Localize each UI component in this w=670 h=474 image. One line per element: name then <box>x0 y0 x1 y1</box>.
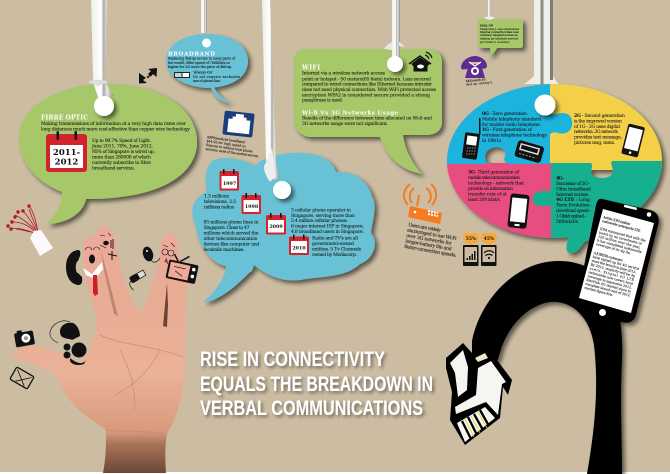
text: phone lines: millions which served the <box>204 230 259 236</box>
cable: network cable <box>472 261 622 474</box>
icon: smartphone 3G <box>507 193 530 229</box>
text: 2G: provides text message, <box>574 134 623 140</box>
text: cellular and ISP: Singapore, serving more than <box>291 213 355 219</box>
icon: calendar 2010: 2010 <box>292 246 306 252</box>
text: dial-up: ordinary telephone lines by <box>480 33 518 37</box>
heading: wifi vs 3g: Wi-fi Vs 3G Networks Usage <box>301 110 398 116</box>
text: 0G and 1G: for mobile radio telephone. <box>482 122 542 128</box>
text: broadband description: Do not require exclusive <box>193 75 240 79</box>
text: 3G: 3G- Third generation of <box>468 170 519 176</box>
text: phone lines: devices like computer and <box>204 242 260 248</box>
text: wifi encouragement: Users are widely <box>408 222 442 234</box>
finger face: talking with tie <box>83 247 103 296</box>
text: radio and TV: entities. 5 Tv Channels <box>312 246 362 252</box>
hanging ribbon: dial-up <box>484 0 495 20</box>
text: 4G: 500mbit/s <box>556 219 579 225</box>
text: phone article: nationwide coverage for LTE. <box>602 219 641 233</box>
text: 3G: least 200 kbit/s. <box>468 197 502 203</box>
text: phone article: IDM announced that with the <box>600 227 646 243</box>
icon: modem sockets <box>174 72 190 78</box>
text: phone article: complete launch end of 2012 <box>585 282 630 298</box>
text: wifi encouragement: over 3G networks for <box>406 233 453 247</box>
text: cellular and ISP <box>291 208 365 235</box>
text: wifi description: point or hotspot - 50 meters(65 feets) indoors. Less secured <box>302 76 431 82</box>
text: cellular and ISP: 4.8 broadband users in Singapore. <box>291 229 365 235</box>
text: fibre optic facts: June 2011, 70%, June 2012, <box>91 144 154 150</box>
text: phone article: A JOBSDB customers <box>592 251 623 263</box>
icon: calendar 1997: 1997 <box>223 181 236 187</box>
text: 2G <box>574 113 625 146</box>
text: phone article: Article: IDM realizes <box>602 215 631 226</box>
text: phone article: StarHub 4G started since to <box>586 278 631 294</box>
text: dial-up <box>480 24 520 44</box>
text: 3G: transfer rate of at <box>468 192 507 198</box>
icon: smartphone 2G <box>621 123 645 158</box>
text: broadband price: $39*/month for broadband <box>207 135 245 144</box>
text: phone lines <box>204 220 260 253</box>
icon: 55% cellular phone <box>463 233 479 266</box>
text: wifi encouragement: faster-connection speeds. <box>404 244 458 259</box>
text: fibre optic facts: 95% of Singapore is wired up, <box>92 149 156 155</box>
icon: 55% cellular phone: 55% <box>466 236 477 242</box>
heading: fibre optic: FIBRE OPTIC <box>41 114 88 122</box>
speech bubble: dial-up <box>478 19 523 57</box>
puzzle piece: pink 3G <box>440 163 551 245</box>
finger face: glasses <box>162 243 175 264</box>
text: phone article: coverage of its 4g lte. <box>595 242 631 255</box>
icon: fibre cable with red tips <box>6 204 53 256</box>
text: dial-up: Temporary, non-dedicated <box>480 27 519 31</box>
icon: envelope <box>10 367 34 389</box>
text: 4G: Successor of 3G - <box>556 181 590 187</box>
text: wifi encouragement: encouraged to use Wi-Fi <box>407 227 457 242</box>
icon: smartphone with article <box>577 199 659 323</box>
text: TV and radio counts: televisions, 2.5 <box>204 199 236 205</box>
text: fibre optic intro <box>41 121 190 132</box>
icon: wifi house <box>409 52 432 71</box>
speech bubble: fibre optic <box>19 84 197 224</box>
text: phone lines: Singapore. Close to 47 <box>204 225 250 231</box>
text: dial-up: internet connection dials over <box>480 30 520 34</box>
icon: calendar 2011-2012 <box>46 131 87 172</box>
text: wifi vs 3g result <box>302 116 432 127</box>
text: fibre optic facts <box>91 138 156 172</box>
text: 3G: provide an information <box>468 186 513 192</box>
text: TV and radio counts <box>204 194 236 210</box>
icon: calendar 2011-2012: 2012 <box>55 158 78 168</box>
icon: calendar 1998 <box>242 193 261 214</box>
text: phone article: coverage in expansion 2012. <box>587 274 632 290</box>
text: 2G: of 1G - 2G uses digital <box>574 124 621 130</box>
icon: network jack <box>222 111 255 138</box>
hanging ribbon: wifi <box>384 0 405 72</box>
text: dial-up: DIAL UP <box>480 24 494 28</box>
text: dial-up price: $45/month for <box>466 77 487 83</box>
text: fibre optic facts: more than 280000 of which <box>92 154 151 160</box>
text: phone article: By 2013, majority will be 4g <box>590 262 636 278</box>
text: broadband description: 'Always-On' <box>193 70 213 74</box>
text: broadband price <box>205 135 261 158</box>
text: broadband description: the world. Offer speed of 700Kbit/s or <box>168 61 230 65</box>
text: wifi description: encryption WPA2 is considered secure provided a strong <box>302 92 430 98</box>
text: radio and TV: owned by Mediacorp. <box>312 252 358 258</box>
text: dial-up: dialing an internet service <box>480 36 518 40</box>
text: wifi description: Internet via a wireless network access <box>302 70 386 76</box>
text: fibre optic facts: currently subscribe to fibre <box>92 160 151 166</box>
text: wifi description <box>302 70 437 104</box>
text: TV and radio counts: 1.3 millions <box>204 194 230 200</box>
text: phone article: have signed up for 4G service <box>592 255 640 271</box>
heading: wifi: WIFI <box>301 64 320 72</box>
icon: double arrow <box>139 68 157 84</box>
text: dial-up price: dial up -shanty's <box>466 80 493 86</box>
icon: camera <box>14 328 35 347</box>
text: broadband description <box>168 56 240 83</box>
text: 4G: Internet access. <box>556 192 590 198</box>
icon: calendar 2009: 2009 <box>269 224 283 230</box>
hanging ribbon: fibre optic <box>88 0 114 116</box>
hanging ribbon: broadband <box>201 0 211 48</box>
puzzle piece: 4G teal tab <box>555 230 600 253</box>
puzzle piece: teal knob <box>533 190 551 206</box>
text: 4G: 4G LTE : Long <box>556 197 590 203</box>
text: fibre optic intro: long distances much more cost-effective than copper wire technology <box>41 126 190 132</box>
text: 4G: Ultra broadband <box>556 186 591 192</box>
text: wifi vs 3g result: 3G networks usage were not significant. <box>302 121 389 127</box>
title: RISE IN CONNECTIVITY <box>200 348 385 371</box>
text: 0G and 1G <box>482 111 547 144</box>
text: wifi description: passphrase is used. <box>302 98 344 104</box>
text: wifi encouragement: longer-battery life and <box>405 238 452 252</box>
hanging ribbon: cloud <box>262 0 291 199</box>
text: broadband description: Replacing dial-up access in many parts of <box>168 56 236 60</box>
icon: calendar 2009 <box>266 213 286 234</box>
text: 0G and 1G: 1G - First generation of <box>482 127 532 133</box>
icon: RJ45 connector <box>446 343 512 445</box>
icon: TV on finger <box>165 252 200 284</box>
finger face: shouting <box>100 233 117 260</box>
icon: calendar 1998: 1998 <box>245 204 259 210</box>
text: fibre optic intro: Making transmissions of information at a very high data rates over <box>41 121 187 127</box>
icon: 45% wifi phone: 45% <box>484 236 495 242</box>
text: phone lines: facsimile machines. <box>204 247 245 253</box>
puzzle piece: teal 4G <box>550 161 665 245</box>
icon: pager <box>514 140 545 164</box>
photo: hand with finger faces <box>13 226 187 473</box>
text: fibre optic facts: broadband services. <box>92 166 136 172</box>
text: phone article <box>583 215 650 302</box>
text: wifi encouragement <box>404 222 461 259</box>
title <box>200 348 433 420</box>
icon: calendar 2010 <box>289 234 309 255</box>
text: 0G and 1G: in 1981s <box>482 138 502 144</box>
text: 4G: 1 Gbit/s upload - <box>556 214 586 220</box>
icon: computer mouse <box>141 245 160 263</box>
text: broadband description: higher for 2/3 more the price of dial-up. <box>168 65 232 69</box>
text: phone article: current figure lists. <box>584 286 614 297</box>
text: dial-up: provider's number. <box>480 40 510 44</box>
text: 2G: networks. 2G network <box>574 129 618 135</box>
text: radio and TV: government-owned <box>312 241 354 247</box>
text: phone article: it has completed nationwide <box>597 238 642 254</box>
text: 0G and 1G: 0G - Zero generation <box>482 111 527 117</box>
speech bubble: wifi <box>294 49 442 174</box>
text: radio and TV <box>312 236 362 258</box>
icon: calendar 1997 <box>220 169 239 190</box>
hanging ribbon: puzzle <box>524 0 559 88</box>
text: 4G: 4G - <box>556 176 564 182</box>
text: broadband price: licences to without local phone <box>206 143 253 153</box>
heading: broadband: BROADBAND <box>168 52 215 58</box>
text: 4G: download speed - <box>556 208 591 214</box>
text: cellular and ISP: 5.4 million cellular phones. <box>291 218 349 224</box>
text: cellular and ISP: 6 major internet ISP in Singapore, <box>291 224 365 230</box>
text: phone article: nationwide now covers local <box>588 270 633 286</box>
icon: router with signal <box>404 184 442 224</box>
text: 3G: mobile telecommunication <box>468 175 520 181</box>
text: phone lines: 95 millions phone lines in <box>204 220 259 226</box>
text: 4G <box>556 176 592 225</box>
text: phone article: since the launch in June 2012. <box>591 259 637 274</box>
text: wifi description: does not need physical connection. With WiFi protected access <box>302 87 437 93</box>
title: VERBAL COMMUNICATIONS <box>200 397 423 420</box>
icon: people silhouettes <box>50 321 86 365</box>
text: wifi description: compared to wired connections like Ethernet because intruder <box>302 82 433 88</box>
icon: usb plug <box>126 270 149 290</box>
text: phone article: 120 million over the year, <box>598 234 641 250</box>
text: phone article: users. Singtel 4G LTE <box>589 266 635 282</box>
text: broadband description: use of phone line. <box>193 79 221 83</box>
text: 3G <box>468 170 524 203</box>
text: radio and TV: Radio and TV's are all <box>312 236 359 242</box>
text: 2G: pictures msg, mms. <box>574 140 616 146</box>
icon: telephone handset <box>66 250 82 285</box>
speech bubble: cloud timeline <box>192 153 375 302</box>
text: TV and radio counts: millions radios <box>204 204 235 210</box>
text: 2G: 2G - Second generation <box>574 113 625 119</box>
text: 0G and 1G: wireless telephone technology <box>482 132 547 138</box>
text: phone article: boost by an investment of <box>599 231 643 246</box>
title: EQUALS THE BREAKDOWN IN <box>200 373 433 396</box>
icon: purple telephone <box>461 56 487 78</box>
puzzle piece: blue 0G/1G <box>440 80 572 164</box>
puzzle piece: yellow 2G <box>550 80 665 170</box>
text: dial-up price <box>466 77 493 86</box>
icon: brick mobile phone <box>462 118 480 160</box>
text: phone lines: other telecommunication <box>204 236 258 242</box>
text: 2G: is the improved version <box>574 118 622 124</box>
text: wifi vs 3g result: Results of the difference between time allocated on Wi-fi and <box>302 116 432 122</box>
icon: calendar 2011-2012: 2011- <box>53 148 81 158</box>
text: cellular and ISP: 3 cellular phone operator in <box>291 208 351 214</box>
icon: 45% wifi phone <box>481 233 497 266</box>
text: broadband price: services, most of the market service. <box>205 147 259 158</box>
text: 4G: Term Evolution - <box>556 202 592 208</box>
text: 0G and 1G: Mobile telephony standard <box>482 116 541 122</box>
hole: puzzle <box>534 94 556 116</box>
puzzle: mobile generations <box>440 80 665 253</box>
text: broadband price: $44.95 for high speed no <box>206 139 247 149</box>
text: fibre optic facts: Up to 99.7% Speed of Light. <box>92 138 152 144</box>
text: 3G: technology - network that <box>468 180 524 186</box>
speech bubble: broadband <box>166 34 248 103</box>
